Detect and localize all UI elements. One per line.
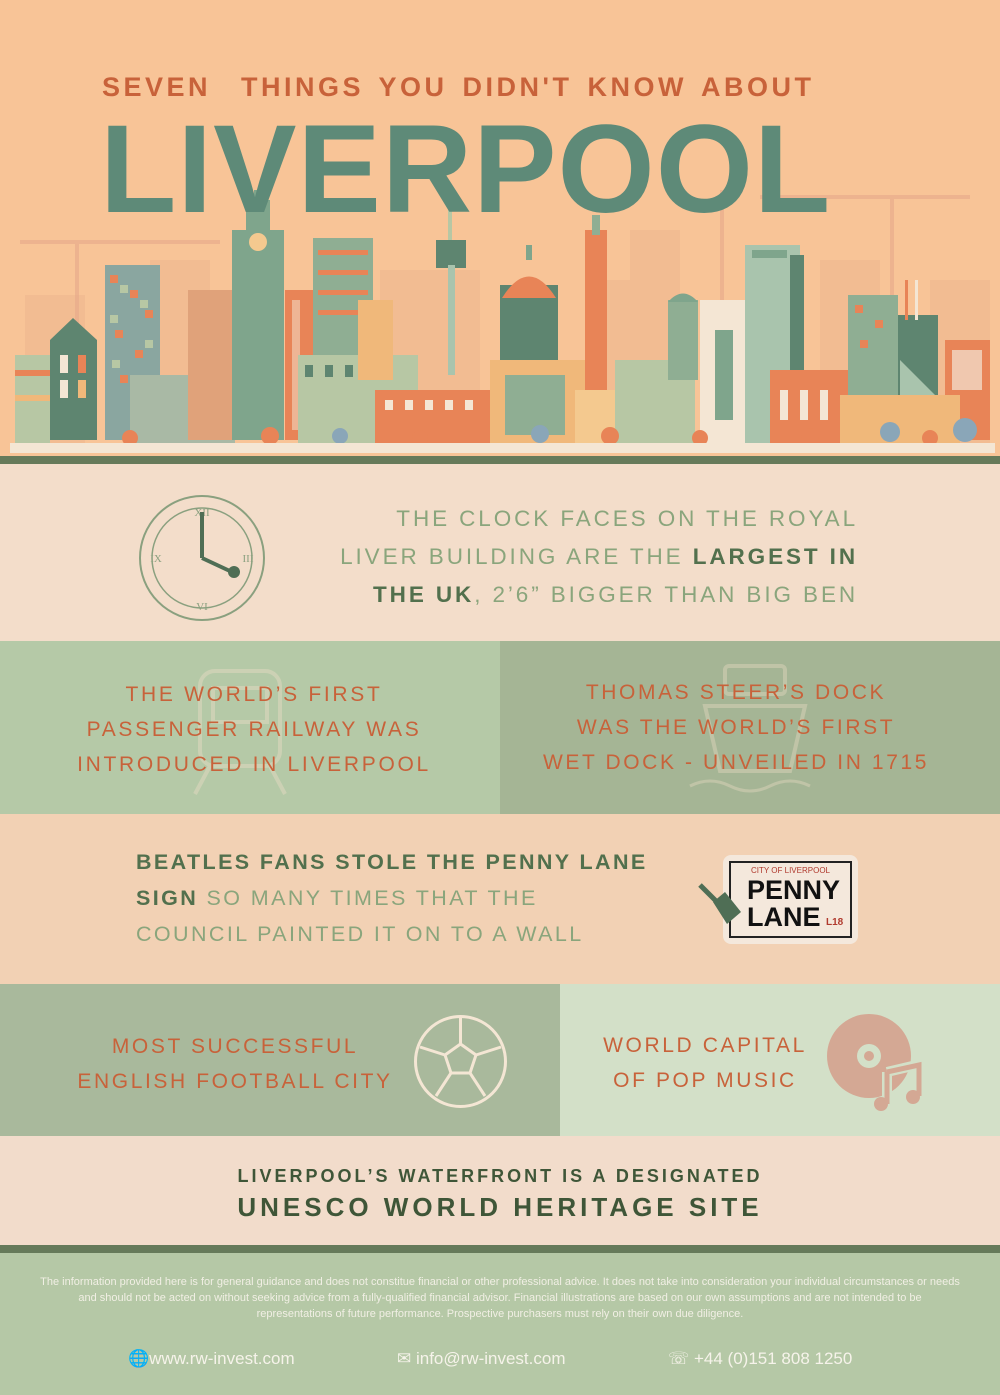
- icon: ship: [690, 664, 810, 792]
- header background: [0, 0, 1000, 458]
- icon: clock: III: [242, 553, 254, 565]
- text: clock fact: [340, 506, 858, 607]
- icon: clock: [139, 495, 265, 621]
- panel: railway: [0, 641, 500, 814]
- footer: [0, 1253, 1000, 1395]
- text: penny lane: [136, 850, 648, 946]
- text: penny lane: BEATLES FANS STOLE THE PENNY LANE: [136, 850, 648, 874]
- text: dock: [543, 681, 929, 774]
- text: pop music: OF POP MUSIC: [613, 1069, 797, 1092]
- text: clock fact: THE CLOCK FACES ON THE ROYAL: [396, 506, 858, 531]
- text: unesco: UNESCO WORLD HERITAGE SITE: [237, 1192, 763, 1222]
- text: railway: PASSENGER RAILWAY WAS: [87, 718, 421, 741]
- icon: train: [194, 669, 286, 795]
- icon: penny lane sign: L18: [826, 917, 843, 928]
- icon: penny lane sign: LANE: [747, 902, 820, 932]
- text: unesco: LIVERPOOL’S WATERFRONT IS A DESIGNATED: [237, 1166, 763, 1186]
- icon: clock: XII: [194, 507, 210, 519]
- title: LIVERPOOL: LIVERPOOL: [100, 100, 831, 239]
- divider: [0, 456, 1000, 464]
- text: unesco: [237, 1166, 763, 1222]
- contact: website: 🌐www.rw-invest.com: [128, 1349, 295, 1368]
- text: penny lane: COUNCIL PAINTED IT ON TO A WALL: [136, 922, 584, 946]
- subtitle: SEVEN THINGS YOU DIDN'T KNOW ABOUT: [102, 72, 814, 102]
- icon: paint brush: [698, 883, 741, 924]
- icon: penny lane sign: [723, 855, 858, 944]
- text: railway: THE WORLD’S FIRST: [125, 683, 383, 706]
- icon: music disc: [827, 1014, 922, 1111]
- panel: UNESCO: [0, 1136, 1000, 1246]
- contact: phone: ☏ +44 (0)151 808 1250: [668, 1349, 852, 1368]
- disclaimer: The information provided here is for general guidance and does not constitue financial or other professional advice. It does not take into consideration your individual circumstances or needs and should not be acted on without seeking advice from a fully-qualified financial advisor. Financial illustrations are based on our own assumptions and are not intended to be representations of future performance. Prospective purchasers must rely on their own due diligence.: [40, 1276, 960, 1320]
- icon: penny lane sign: PENNY: [747, 875, 840, 905]
- text: dock: WAS THE WORLD’S FIRST: [577, 716, 895, 739]
- divider: [0, 1245, 1000, 1253]
- text: dock: THOMAS STEER’S DOCK: [586, 681, 886, 704]
- icon: penny lane sign: CITY OF LIVERPOOL: [751, 866, 830, 875]
- panel: dock: [500, 641, 1000, 814]
- text: football: MOST SUCCESSFUL: [112, 1035, 358, 1058]
- text: clock fact: LIVER BUILDING ARE THE LARGEST IN: [340, 544, 858, 569]
- panel: penny lane: [0, 814, 1000, 984]
- icon: clock: VI: [196, 601, 208, 613]
- text: clock fact: THE UK, 2’6” BIGGER THAN BIG BEN: [373, 582, 858, 607]
- skyline illustration: [10, 190, 995, 453]
- panel: pop music: [560, 984, 1000, 1136]
- text: pop music: WORLD CAPITAL: [603, 1034, 807, 1057]
- text: railway: INTRODUCED IN LIVERPOOL: [77, 753, 431, 776]
- text: pop music: [603, 1034, 807, 1092]
- icon: clock: IX: [150, 553, 162, 565]
- text: football: [77, 1035, 393, 1093]
- text: railway: [77, 683, 431, 776]
- panel: clock fact: [0, 464, 1000, 641]
- contact: email: ✉ info@rw-invest.com: [397, 1349, 565, 1368]
- text: football: ENGLISH FOOTBALL CITY: [77, 1070, 393, 1093]
- icon: football: [414, 1015, 507, 1108]
- panel: football: [0, 984, 560, 1136]
- text: penny lane: SIGN SO MANY TIMES THAT THE: [136, 886, 538, 910]
- text: dock: WET DOCK - UNVEILED IN 1715: [543, 751, 929, 774]
